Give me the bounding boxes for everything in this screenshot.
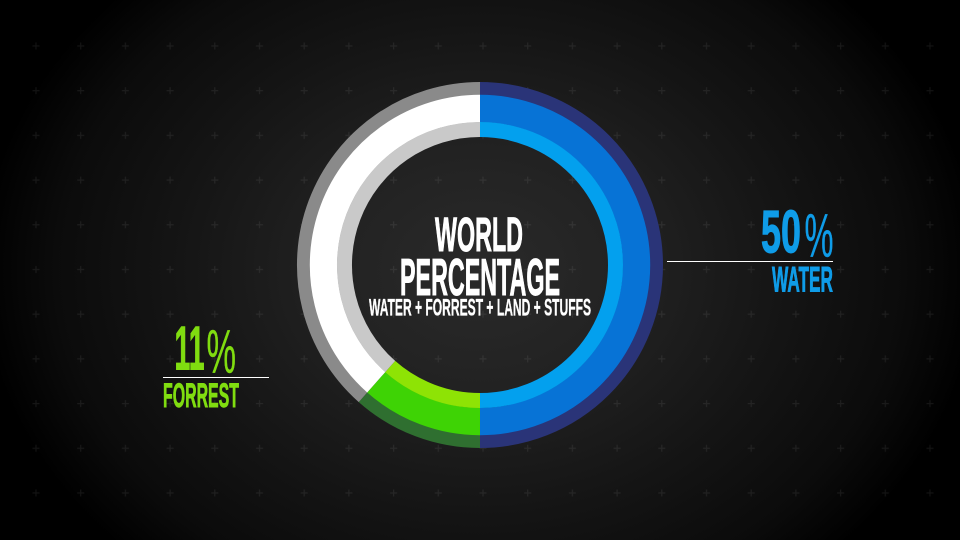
center title: WORLD <box>435 209 523 262</box>
center title: PERCENTAGE <box>400 249 560 307</box>
segment: forrest 11% <box>363 366 480 441</box>
percent sign: % <box>804 202 834 270</box>
center title <box>369 209 591 322</box>
percent sign: % <box>206 318 236 386</box>
callout: water <box>667 198 834 300</box>
text: WATER <box>772 260 833 300</box>
callout: forrest: FORREST <box>163 377 239 415</box>
leader line <box>163 377 269 378</box>
segment: water 50% <box>480 89 656 441</box>
callout: forrest <box>163 314 269 415</box>
segment: remainder <box>304 89 480 397</box>
callout: forrest: 11 <box>174 314 204 384</box>
leader line <box>667 261 833 262</box>
donut chart <box>304 89 656 441</box>
value: 50: 50 <box>761 198 801 266</box>
subtitle: WATER + FORREST + LAND + STUFFS <box>369 294 591 322</box>
